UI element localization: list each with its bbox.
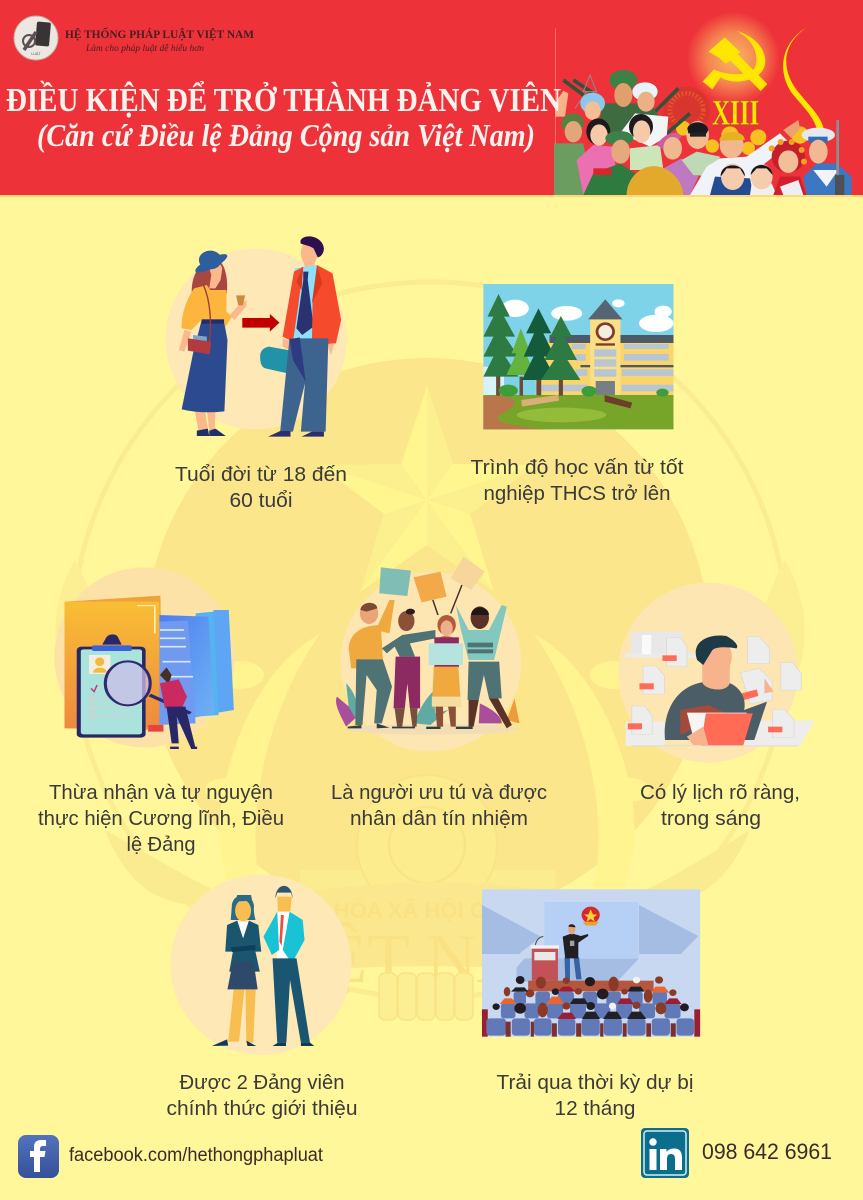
header illustration: party emblem and people (554, 12, 852, 195)
subtitle: (Căn cứ Điều lệ Đảng Cộng sản Việt Nam) (37, 117, 535, 153)
illustration: clipboard, magnifier and folders (54, 567, 235, 749)
icon: facebook (18, 1135, 59, 1178)
condition text: background: Có lý lịch rõ ràng, (640, 781, 800, 804)
panel: accept party platform (38, 567, 284, 856)
condition text: age: 60 tuổi (230, 489, 292, 512)
header illustration: party emblem and people: XIII (712, 93, 759, 133)
condition text: outstanding: Là người ưu tú và được (331, 781, 547, 804)
phone number: 098 642 6961 (702, 1139, 832, 1164)
watermark: national emblem (55, 282, 805, 1020)
illustration: businesswoman and businessman (170, 874, 351, 1055)
condition text: education (470, 456, 684, 505)
condition text: recommend: chính thức giới thiệu (166, 1097, 358, 1120)
slogan: Làm cho pháp luật dễ hiểu hơn (85, 43, 204, 54)
condition text: background (640, 781, 800, 830)
illustration: speaker at podium and seated audience (482, 889, 700, 1037)
panel: probation period (482, 889, 700, 1120)
facebook address: facebook.com/hethongphapluat (69, 1145, 324, 1166)
condition text: platform: lệ Đảng (126, 833, 196, 856)
condition text: probation (496, 1071, 694, 1120)
header band (0, 0, 863, 197)
logo badge: LUẬT (31, 52, 41, 56)
condition text: age (175, 463, 347, 512)
panel: education condition (470, 284, 684, 505)
illustration: woman and man with arrow (165, 236, 347, 437)
condition text: recommend (166, 1071, 358, 1120)
illustration: group of activists with signs (336, 557, 521, 752)
condition text: recommend: Được 2 Đảng viên (180, 1071, 344, 1094)
panel: age condition (165, 236, 347, 512)
condition text: platform: Thừa nhận và tự nguyện (49, 781, 273, 804)
illustration: man with folder and documents (618, 583, 814, 763)
condition text: age: Tuổi đời từ 18 đến (175, 463, 347, 486)
condition text: background: trong sáng (661, 807, 761, 830)
condition text: probation: Trải qua thời kỳ dự bị (496, 1071, 694, 1094)
organisation name: HỆ THỐNG PHÁP LUẬT VIỆT NAM (65, 26, 254, 41)
condition text: education: nghiệp THCS trở lên (484, 482, 670, 505)
panel: clear background (618, 583, 814, 830)
panel: outstanding person (331, 557, 547, 830)
condition text: outstanding (331, 781, 547, 830)
condition text: probation: 12 tháng (554, 1097, 636, 1120)
icon: linkedin (641, 1128, 689, 1178)
condition text: platform (38, 781, 284, 856)
watermark: national emblem: CỘNG HÒA XÃ HỘI CHỦ NGHĨA (262, 898, 595, 923)
watermark: national emblem: VIỆT NAM (251, 921, 589, 998)
logo badge (14, 16, 58, 60)
title: ĐIỀU KIỆN ĐỂ TRỞ THÀNH ĐẢNG VIÊN (6, 80, 561, 119)
panel: two party members recommend (166, 874, 358, 1120)
condition text: platform: thực hiện Cương lĩnh, Điều (38, 807, 284, 830)
illustration: school building and trees (483, 284, 673, 429)
condition text: outstanding: nhân dân tín nhiệm (350, 807, 528, 830)
condition text: education: Trình độ học vấn từ tốt (470, 456, 684, 479)
